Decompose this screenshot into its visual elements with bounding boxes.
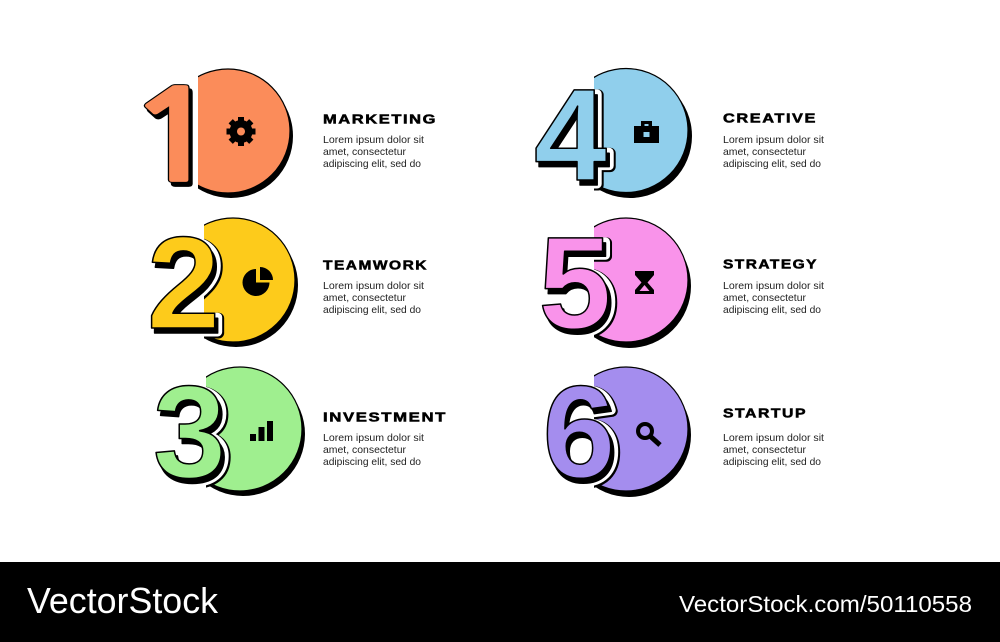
panel: item 1 marketing [144,68,435,198]
icon: magnifier [638,424,660,445]
text block: marketing: Lorem ipsum dolor sit [323,134,424,146]
icon: gear [226,117,256,146]
text block: investment: amet, consectetur [323,444,406,456]
text block: strategy: amet, consectetur [723,292,806,304]
text block: startup [723,432,824,468]
numeral 2: 2 [150,213,223,360]
numeral 5: 5 [542,213,614,360]
panel: item 5 strategy [542,217,824,348]
text block: creative [723,134,824,170]
footer bar [0,562,1000,642]
text block: startup: adipiscing elit, sed do [723,456,821,468]
disc 2: 2 [151,214,224,361]
numeral 4: 4 [537,65,610,212]
text block: investment [323,432,424,468]
text block: teamwork: adipiscing elit, sed do [323,304,421,316]
disc 5 [594,217,691,348]
icon: bar chart [250,421,273,441]
heading: teamwork: TEAMWORK [323,258,428,272]
heading: investment: INVESTMENT [323,410,447,424]
text block: strategy: adipiscing elit, sed do [723,304,821,316]
disc 6 [594,366,691,497]
disc 2 [204,217,298,347]
icon: pie chart [242,267,273,296]
text block: teamwork: amet, consectetur [323,292,406,304]
text block: creative: adipiscing elit, sed do [723,158,821,170]
disc 4: 4 [538,66,611,213]
disc 3 [206,366,305,496]
panel: item 4 creative [535,68,824,198]
numeral 2: 2 [147,209,220,356]
numeral 5: 5 [542,214,614,361]
numeral 1: 1 [124,76,226,201]
icon: briefcase [634,121,659,143]
numeral 3: 3 [156,362,229,509]
numeral 3: 3 [156,363,229,510]
numeral 6: 6 [546,363,618,510]
numeral 1: 1 [124,76,226,201]
numeral 1: 1 [127,80,229,205]
text block: strategy [723,280,824,316]
footer logo text: VectorStock [27,580,219,621]
footer image id: VectorStock.com/50110558 [679,591,972,617]
text block: startup: Lorem ipsum dolor sit [723,432,824,444]
icon: hourglass [635,271,654,294]
text block: startup: amet, consectetur [723,444,806,456]
text block: marketing [323,134,424,170]
heading: strategy: STRATEGY [723,258,818,272]
numeral 6: 6 [543,358,615,505]
panel: item 3 investment [155,366,446,496]
text block: investment: adipiscing elit, sed do [323,456,421,468]
numeral 4: 4 [537,66,610,213]
disc 6: 6 [547,363,619,510]
heading: startup: STARTUP [723,406,807,420]
numeral 4: 4 [534,61,607,208]
heading: marketing: MARKETING [323,112,437,126]
text block: teamwork [323,280,424,316]
numeral 3: 3 [153,358,226,505]
numeral 6: 6 [546,362,618,509]
disc 5: 5 [543,214,615,361]
disc 1 [198,68,293,198]
text block: teamwork: Lorem ipsum dolor sit [323,280,424,292]
text block: strategy: Lorem ipsum dolor sit [723,280,824,292]
text block: marketing: amet, consectetur [323,146,406,158]
disc 4 [594,68,692,198]
numeral 2: 2 [150,214,223,361]
panel: item 2 teamwork [150,217,427,347]
text block: investment: Lorem ipsum dolor sit [323,432,424,444]
disc 3: 3 [157,363,230,510]
text block: creative: amet, consectetur [723,146,806,158]
text block: creative: Lorem ipsum dolor sit [723,134,824,146]
numeral 5: 5 [539,209,611,356]
heading: creative: CREATIVE [723,112,817,126]
panel: item 6 startup [546,366,824,497]
text block: marketing: adipiscing elit, sed do [323,158,421,170]
